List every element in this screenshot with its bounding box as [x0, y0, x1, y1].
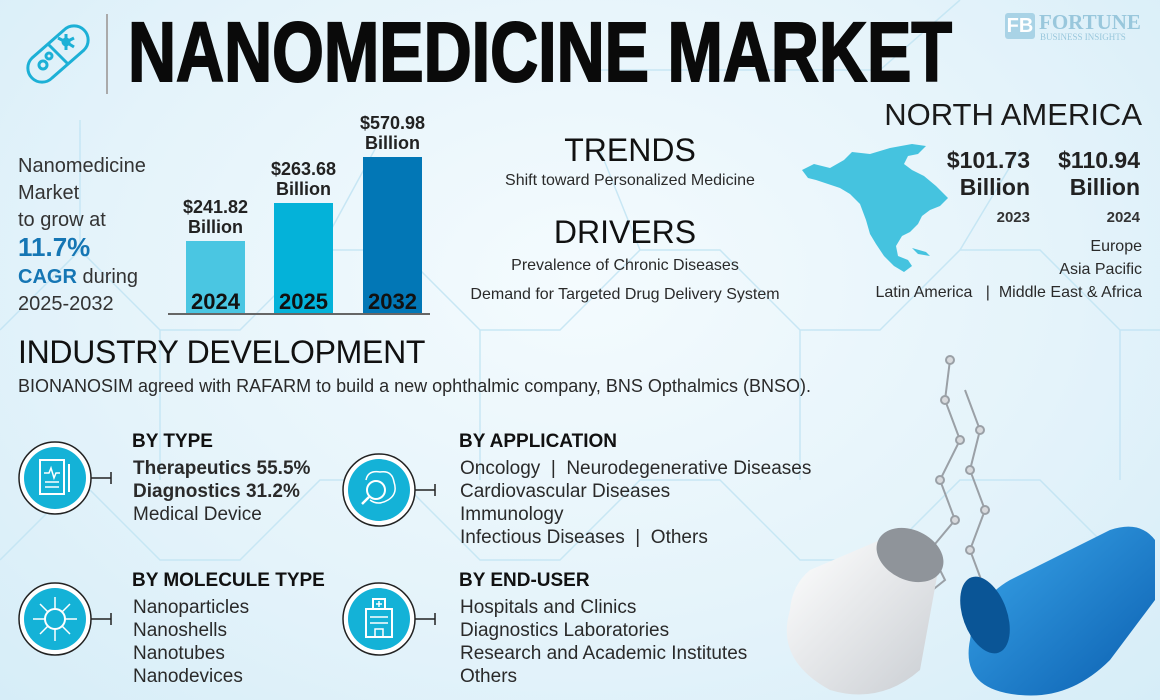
logo: Fortune Business Insights: FB	[1007, 15, 1033, 37]
panel: by molecule type: BY MOLECULE TYPE	[132, 570, 325, 591]
other regions: Asia Pacific	[1059, 261, 1142, 278]
text: Billion	[1070, 174, 1140, 200]
drivers: Demand for Targeted Drug Delivery System	[470, 286, 780, 303]
text: CAGR: Market	[18, 182, 79, 204]
text: Billion	[960, 174, 1030, 200]
text: CAGR: Nanomedicine	[18, 155, 146, 177]
bar chart: $241.82	[183, 197, 248, 217]
panel: by application	[342, 431, 811, 548]
map: north america	[802, 144, 948, 272]
logo: Fortune Business Insights	[1005, 10, 1141, 42]
trends	[505, 132, 755, 189]
icon: nanoparticle	[18, 582, 112, 656]
panel: by type: Diagnostics 31.2%	[133, 481, 300, 502]
other regions	[876, 238, 1142, 301]
panel: by type: Medical Device	[133, 504, 262, 525]
bar chart: $570.98	[360, 113, 425, 133]
industry development	[18, 334, 811, 396]
industry development: INDUSTRY DEVELOPMENT	[18, 334, 425, 370]
panel: by end-user: BY END-USER	[459, 570, 590, 591]
bar chart	[168, 113, 430, 315]
logo: Fortune Business Insights: FORTUNE	[1039, 10, 1141, 34]
text: CAGR: 11.7%	[18, 232, 90, 262]
icon: magnifier	[342, 453, 436, 527]
text: CAGR	[18, 155, 146, 315]
bar chart: 2025	[279, 289, 328, 314]
panel: by end-user: Others	[460, 666, 517, 687]
panel: by end-user	[342, 570, 747, 687]
drivers: Prevalence of Chronic Diseases	[511, 257, 739, 274]
panel: by molecule type: Nanoshells	[133, 620, 227, 641]
icon: clipboard	[18, 441, 112, 515]
text: CAGR: 2025-2032	[18, 293, 114, 315]
drivers	[470, 214, 780, 303]
text: $101.73	[947, 147, 1030, 173]
panel: by type: Therapeutics 55.5%	[133, 458, 310, 479]
panel: by application: BY APPLICATION	[459, 431, 617, 452]
bar chart: $263.68	[271, 159, 336, 179]
industry development: BIONANOSIM agreed with RAFARM to build a new ophthalmic company, BNS Opthalmics (BNSO).	[18, 376, 811, 396]
drivers: DRIVERS	[554, 214, 696, 250]
text: CAGR: CAGR during	[18, 266, 138, 288]
panel: by molecule type: Nanoparticles	[133, 597, 249, 618]
logo: Fortune Business Insights: BUSINESS INSIGHTS	[1040, 32, 1126, 42]
icon: hospital	[342, 582, 436, 656]
panel: by end-user: Research and Academic Institutes	[460, 643, 747, 664]
illustration: open capsule with molecules	[787, 355, 1155, 696]
trends: TRENDS	[564, 132, 696, 168]
bar chart: 2032	[368, 289, 417, 314]
panel: by end-user: Diagnostics Laboratories	[460, 620, 669, 641]
other regions: Latin America | Middle East & Africa	[876, 284, 1142, 301]
panel: by molecule type: Nanotubes	[133, 643, 225, 664]
panel: by application: Immunology	[460, 504, 564, 525]
north america stats: NORTH AMERICA	[884, 97, 1142, 132]
other regions: Europe	[1090, 238, 1142, 255]
panel: by application: Infectious Diseases | Others	[460, 527, 708, 548]
bar chart: Billion	[365, 133, 420, 153]
panel: by type	[18, 431, 310, 525]
text: 2024	[1107, 209, 1140, 226]
panel: by application: Cardiovascular Diseases	[460, 481, 670, 502]
icon: capsule logo	[26, 24, 90, 84]
panel: by type: BY TYPE	[132, 431, 213, 452]
panel: by molecule type: Nanodevices	[133, 666, 243, 687]
panel: by application: Oncology | Neurodegenerative Diseases	[460, 458, 811, 479]
panel: by end-user: Hospitals and Clinics	[460, 597, 636, 618]
bar chart: 2024	[191, 289, 240, 314]
text: 2023	[997, 209, 1030, 226]
trends: Shift toward Personalized Medicine	[505, 172, 755, 189]
bar chart: Billion	[276, 179, 331, 199]
text: $110.94	[1058, 147, 1140, 173]
panel: by molecule type	[18, 570, 325, 687]
text: CAGR: to grow at	[18, 209, 106, 231]
bar chart: Billion	[188, 217, 243, 237]
